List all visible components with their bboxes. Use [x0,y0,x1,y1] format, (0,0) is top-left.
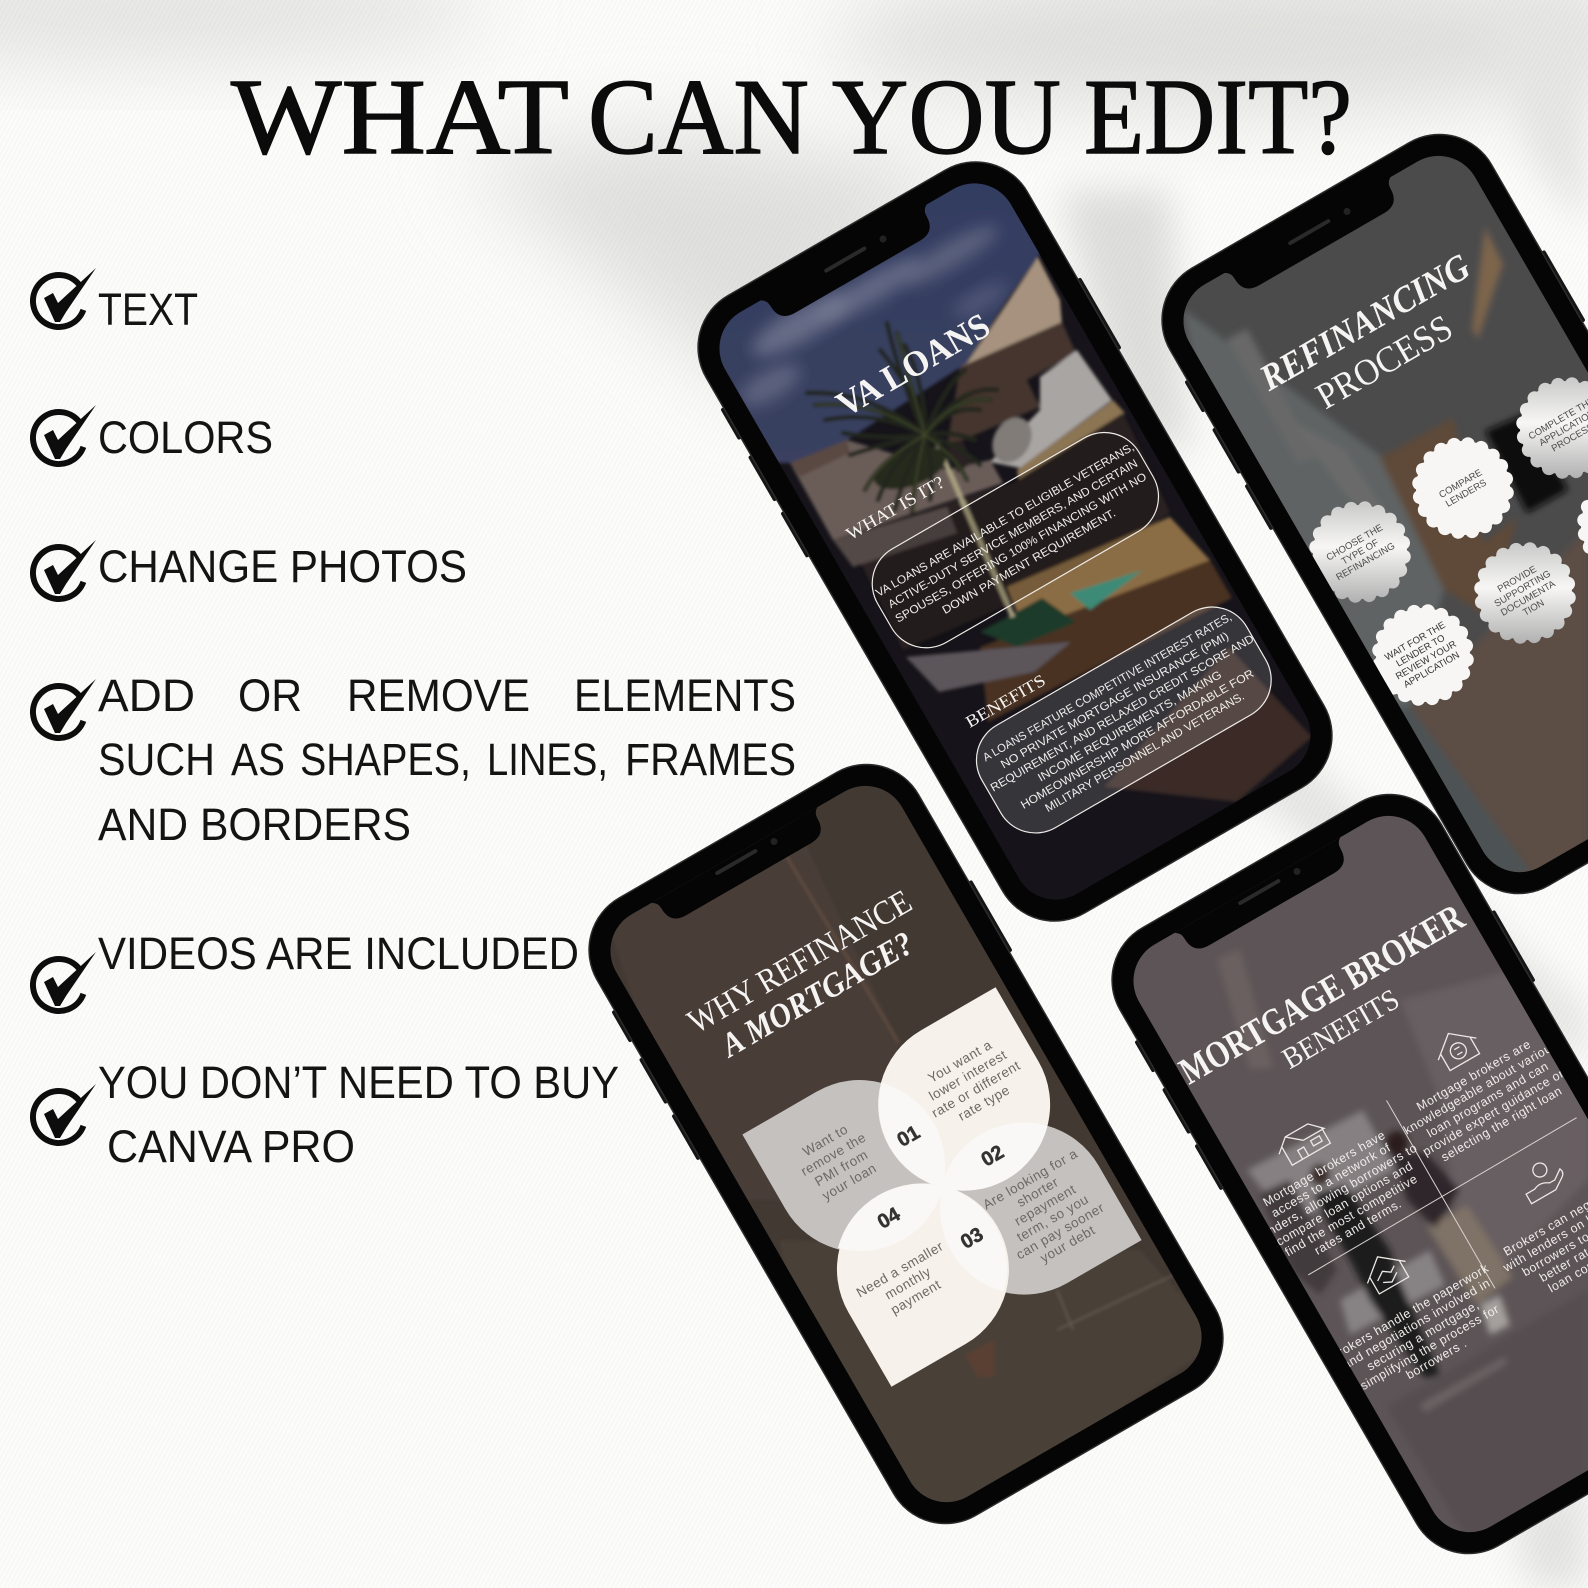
petal text: Want to [800,1121,851,1159]
icon: house with dollar [1429,1023,1484,1073]
item: add or remove elements: AS [231,734,285,785]
icon: house [1273,1118,1332,1168]
petal text: shorter [1014,1174,1061,1210]
text: loan knowledge: Mortgage brokers are [1414,1037,1533,1114]
checklist [33,268,796,1172]
outlined card: benefits: MILITARY PERSONNEL AND VETERANS. [1043,691,1247,815]
phone: VA loans [673,138,1357,950]
outlined card: what is it: SPOUSES, OFFERING 100% FINANCING WITH NO [894,471,1149,625]
heading: mortgage broker benefits [1176,907,1468,1085]
item: add or remove elements: ADD [98,670,195,721]
notch with speaker and camera [652,808,821,918]
seal: choose the type of refinancing: TYPE OF [1340,537,1381,567]
petal: lower interest [878,987,1050,1191]
petal text: repayment [1012,1182,1079,1229]
text: network access: access to a network of [1269,1140,1393,1220]
outlined card: benefits: REQUIREMENT, AND RELAXED CREDIT SCORE AND [989,633,1256,794]
item: videos included: VIDEOS ARE INCLUDED [98,928,579,979]
overlap lenses [838,1084,1048,1292]
text: paperwork: and negotiations involved in [1340,1276,1493,1372]
seal: compare lenders: COMPARE [1437,467,1484,501]
text: paperwork: Brokers handle the paperwork [1328,1261,1491,1364]
item: no canva pro needed [33,1057,619,1172]
text: paperwork: borrowers . [1404,1336,1469,1382]
petal text: monthly [882,1264,934,1302]
petal: shorter term [956,1126,1142,1295]
item: add or remove elements: ELEMENTS [574,670,796,721]
petal text: PMI from [812,1147,871,1189]
icon: hand holding dollar [1516,1155,1569,1204]
text: loan knowledge: provide expert guidance on [1420,1065,1569,1159]
outlined card: what is it: VA LOANS ARE AVAILABLE TO ELIGIBLE VETERANS, [874,441,1136,600]
text: network access: lenders, allowing borrowers to [1256,1141,1420,1243]
photo: palm tree and modern house [720,183,1310,900]
petal text: term, so you [1014,1192,1091,1245]
item: colors: COLORS [98,412,273,463]
seal: provide supporting documentation [1474,542,1576,644]
title: YOU [832,58,1061,177]
outlined card: what is it: DOWN PAYMENT REQUIREMENT. [940,507,1118,617]
text: loan knowledge: loan programs and can [1424,1059,1551,1140]
title: WHAT [231,58,569,177]
petal text: remove the [798,1130,869,1179]
icon: check mark [33,540,96,599]
text: paperwork: securing a mortgage, [1364,1298,1482,1374]
photo: people in bright room [1134,816,1588,1532]
outlined card: what is it: ACTIVE-DUTY SERVICE MEMBERS, AND CERTAIN [886,458,1140,611]
item: add or remove elements: AND BORDERS [98,799,411,850]
outlined card: benefits: NO PRIVATE MORTGAGE INSURANCE (PMI) [999,630,1231,771]
item: add or remove elements: FRAMES [625,734,796,785]
numbers: 04 [874,1203,905,1234]
dividers [1308,1100,1577,1288]
numbers: 03 [957,1224,987,1254]
item: add or remove elements: SHAPES, [300,734,471,785]
icon: check mark [33,268,96,327]
item: no canva pro needed: CANVA PRO [107,1121,355,1172]
petal text: payment [888,1277,944,1317]
item: add or remove elements: REMOVE [347,670,530,721]
item: add or remove elements: SUCH [98,734,215,785]
text: network access: compare loan options and [1274,1159,1416,1249]
heading: what is it: WHAT IS IT? [843,472,948,544]
heading: refinancing process: REFINANCING [1252,246,1477,400]
outlined card: benefits: A LOANS FEATURE COMPETITIVE INTEREST RATES, [981,611,1234,764]
petal text: rate type [956,1082,1012,1124]
seal: wait for the lender: WAIT FOR THE [1383,620,1447,663]
diagram: four overlapping petals [742,987,1143,1388]
text: network access: Mortgage brokers have [1261,1128,1388,1209]
petal: smaller payment [836,1183,1009,1387]
text: loan knowledge: selecting the right loan [1439,1084,1565,1164]
seal: wait for the lender [1372,604,1474,706]
heading: mortgage broker benefits: MORTGAGE BROKER [1172,896,1472,1093]
item: text: TEXT [98,284,198,335]
petal text: your debt [1038,1222,1098,1266]
icon: check mark [33,1084,96,1143]
item: text [33,268,198,335]
title: EDIT? [1084,58,1352,177]
icon: check mark [33,679,96,738]
heading: why refinance a mortgage: WHY REFINANCE [682,883,918,1041]
heading: mortgage broker benefits: BENEFITS [1277,983,1405,1076]
petal text [802,1042,1103,1317]
item: add or remove elements: LINES, [487,734,608,785]
text: network access: find the most competitive [1282,1172,1420,1259]
phone: refinancing process [1161,134,1588,894]
seal: wait for the lender: APPLICATION [1402,650,1462,691]
photo: dim brown room [610,786,1202,1502]
notch with speaker and camera [760,204,930,316]
petal text: Are looking for a [980,1146,1080,1212]
item: change photos [33,540,467,599]
outlined card: benefits [976,606,1272,834]
item: no canva pro needed: YOU DON’T NEED TO BUY [98,1057,619,1108]
heading: why refinance a mortgage: A MORTGAGE? [714,925,920,1065]
outlined card: benefits: HOMEOWNERSHIP MORE AFFORDABLE FOR [1019,668,1256,812]
seal: complete the application process [1516,377,1588,479]
title [231,58,1352,177]
outlined card: what is it [872,432,1160,648]
numbers [878,1126,1005,1248]
text: loan knowledge: knowledgeable about various [1401,1038,1560,1137]
outlined card: benefits: INCOME REQUIREMENTS, MAKING [1036,669,1224,784]
heading: benefits: BENEFITS [962,671,1049,732]
petal text: rate or different [929,1058,1023,1121]
item: colors [33,405,273,464]
item: add or remove elements: OR [238,670,302,721]
seal: wait for the lender: REVIEW YOUR [1394,639,1459,682]
petal text: Need a smaller [854,1238,946,1300]
seal: choose the type of refinancing: CHOOSE THE [1325,522,1385,563]
numbers: 01 [894,1122,924,1152]
title: CAN [588,58,809,177]
petal text: can pay sooner [1013,1200,1107,1262]
item: change photos: CHANGE PHOTOS [98,541,467,592]
numbers: 02 [978,1141,1008,1171]
petal: remove PMI [742,1080,931,1250]
icon: house with handshake [1358,1246,1413,1296]
text: paperwork: simplifying the process for [1358,1302,1502,1393]
item: add or remove elements [33,670,796,850]
text: network access: rates and terms. [1312,1196,1404,1258]
phone: mortgage broker benefits [1111,794,1588,1554]
icon: check mark [33,952,96,1011]
seal: wait for the lender: LENDER TO [1394,633,1447,670]
photo: blurred interior [1184,156,1588,872]
seal: choose the type of refinancing: REFINANCING [1334,541,1397,583]
seal: provide supporting documentation: SUPPORTING [1493,569,1553,610]
seal: provide supporting documentation: PROVIDE [1496,564,1539,595]
seal: partly hidden at right edge [1577,500,1588,554]
heading: VA loans: VA LOANS [829,305,997,425]
heading: refinancing process: PROCESS [1309,307,1460,418]
petal text: You want a [925,1037,995,1086]
seal: choose the type of refinancing [1309,501,1411,603]
seal: compare lenders [1412,437,1514,539]
icon: check mark [33,405,96,464]
petal text: lower interest [926,1047,1010,1104]
seal: compare lenders: LENDERS [1444,478,1489,510]
item: videos included [33,928,579,1011]
notch with speaker and camera [1168,832,1360,960]
seal: provide supporting documentation: TION [1521,598,1546,619]
notch with speaker and camera [1218,172,1410,300]
phone: why refinance a mortgage [588,764,1224,1524]
seal: provide supporting documentation: DOCUMENTA [1499,578,1558,619]
petal text: your loan [820,1160,879,1203]
